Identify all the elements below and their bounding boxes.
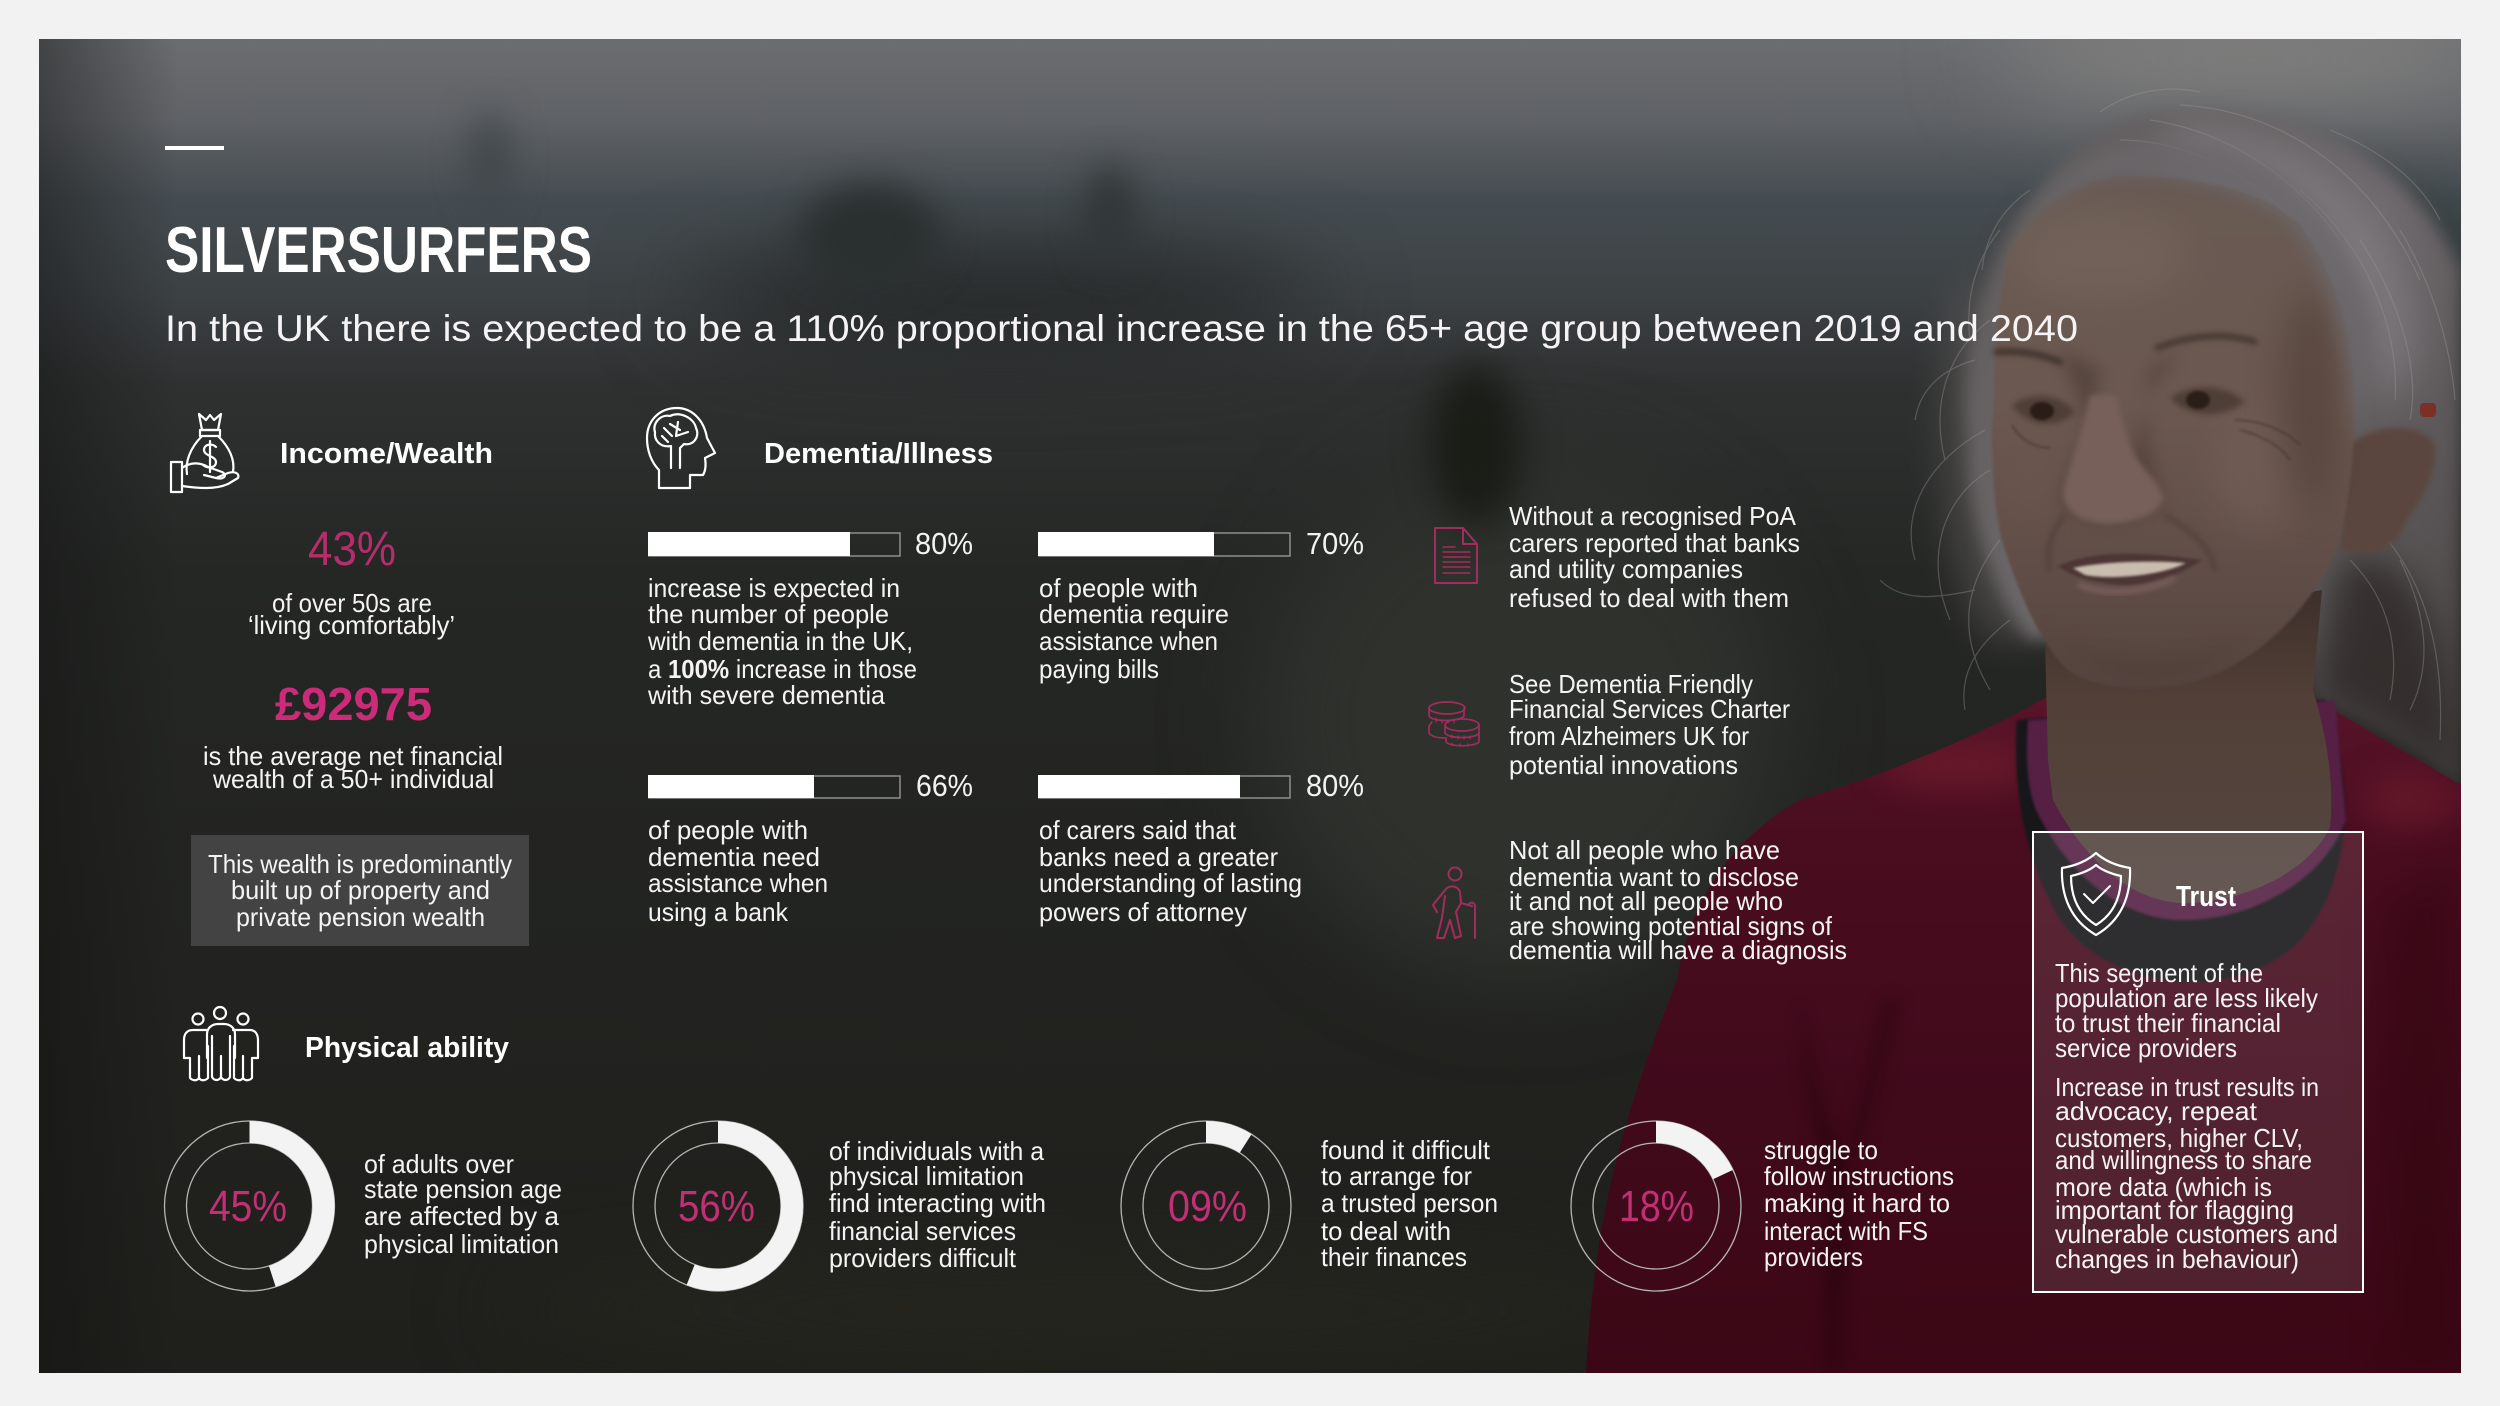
icon: head with brain [647, 408, 715, 488]
text: charter: from Alzheimers UK for [1509, 721, 1749, 751]
text: average wealth: wealth of a 50+ individual [212, 764, 494, 794]
text: 45% caption: of adults over [364, 1149, 514, 1179]
bar stat: 80% carers: of carers said that [1039, 815, 1237, 845]
text: 18% caption: providers [1764, 1242, 1863, 1272]
text: disclosure: dementia want to disclose [1509, 862, 1799, 892]
text: average wealth: is the average net financial [203, 741, 503, 771]
woman: plum collar [2027, 700, 2346, 920]
icon: group of people [184, 1007, 258, 1080]
callout: wealth sources: This wealth is predominantly [208, 849, 512, 879]
text: trust second paragraph: vulnerable customers and [2055, 1219, 2338, 1249]
stat: £92975: £92975 [275, 678, 432, 730]
text: PoA: and utility companies [1509, 554, 1743, 584]
bar stat: 70% paying bills [1038, 526, 1364, 684]
heading: dementia/illness: Dementia/Illness [764, 438, 993, 470]
text: trust second paragraph: and willingness to share [2055, 1145, 2312, 1175]
text: PoA: Without a recognised PoA [1509, 501, 1797, 531]
text: disclosure: Not all people who have [1509, 835, 1780, 865]
donut: 09% [1121, 1121, 1291, 1291]
text: 18% caption: struggle to [1764, 1135, 1878, 1165]
text: disclosure [1509, 835, 1847, 965]
bar stat: 66% using a bank: 66% [916, 768, 973, 803]
text: 09% caption: their finances [1321, 1242, 1467, 1272]
donut: 18% [1571, 1121, 1741, 1291]
woman: brows [1996, 336, 2255, 362]
bar stat: 80% increase: 80% [915, 526, 973, 561]
text: 45% caption [364, 1149, 562, 1259]
text: 18% caption: interact with FS [1764, 1216, 1928, 1246]
woman: nose [2063, 395, 2163, 524]
bar stat: 80% increase: increase is expected in [648, 573, 900, 603]
bar stat: 80% increase: the number of people [648, 599, 889, 629]
subtitle: In the UK there is expected to be a 110% proportional increase in the 65+ age group between 2019 and 2040 [165, 308, 2078, 349]
callout: wealth sources: built up of property and [231, 875, 490, 905]
accent dash [165, 146, 224, 150]
text: 56% caption: physical limitation [829, 1161, 1024, 1191]
bar stat: 66% using a bank: using a bank [648, 897, 789, 927]
woman: hair tie [2420, 403, 2436, 417]
icon: money bag in hand [171, 414, 238, 492]
bar stat: 66% using a bank: dementia need [648, 842, 820, 872]
woman: smile folds [2048, 515, 2215, 570]
bar stat: 80% increase: with severe dementia [647, 680, 886, 710]
text: 56% caption: providers difficult [829, 1243, 1017, 1273]
woman: sweater [1586, 698, 2461, 1373]
text: living comfortably [248, 588, 455, 640]
text: 56% caption [829, 1136, 1046, 1273]
text: disclosure: are showing potential signs of [1509, 911, 1833, 941]
bar stat: 80% carers: powers of attorney [1039, 897, 1247, 927]
bar stat: 70% paying bills: paying bills [1039, 654, 1159, 684]
text: living comfortably: ‘living comfortably’ [248, 610, 455, 640]
bar stat: 70% paying bills: 70% [1306, 526, 1364, 561]
text: trust second paragraph: customers, higher CLV, [2055, 1123, 2303, 1153]
woman: mouth [2058, 554, 2202, 592]
bar stat: 80% increase: with dementia in the UK, [647, 626, 913, 656]
donut: 56%: 56% [678, 1182, 755, 1231]
text: trust second paragraph: important for flagging [2055, 1195, 2294, 1225]
text: 09% caption: to arrange for [1321, 1161, 1472, 1191]
panel: dementia and illness [647, 408, 1847, 965]
text: trust second paragraph: Increase in trust results in [2055, 1072, 2319, 1102]
text: PoA: carers reported that banks [1509, 528, 1800, 558]
donut: 45% [164, 1121, 334, 1291]
icon: elderly person with cane [1433, 868, 1475, 938]
text: 09% caption: to deal with [1321, 1216, 1451, 1246]
bar stat: 80% carers [1038, 768, 1364, 927]
bar stat: 66% using a bank: assistance when [648, 868, 828, 898]
text: charter [1509, 669, 1790, 780]
text: disclosure: dementia will have a diagnosis [1509, 935, 1847, 965]
woman: neck [2045, 590, 2331, 903]
bar stat: 80% increase: a 100% increase in those [648, 654, 917, 684]
bar stat: 80% carers: understanding of lasting [1039, 868, 1302, 898]
text: 18% caption: follow instructions [1764, 1161, 1954, 1191]
text: 45% caption: physical limitation [364, 1229, 559, 1259]
panel: income and wealth [171, 414, 529, 946]
woman: hair over forehead [2154, 142, 2356, 416]
icon: document [1435, 528, 1477, 583]
text: average wealth [203, 741, 503, 794]
text: PoA: refused to deal with them [1509, 583, 1789, 613]
heading: physical ability: Physical ability [305, 1032, 509, 1064]
bar stat: 70% paying bills: of people with [1039, 573, 1198, 603]
text: trust first paragraph: This segment of the [2055, 958, 2263, 988]
panel: trust [2033, 832, 2363, 1292]
icon: coins [1429, 702, 1479, 746]
panel: physical ability [164, 1007, 1954, 1291]
donut: 56% [633, 1121, 803, 1291]
heading: trust: Trust [2176, 881, 2236, 913]
text: trust first paragraph: population are less likely [2055, 983, 2318, 1013]
donut: 18%: 18% [1619, 1182, 1694, 1231]
bar stat: 80% carers: 80% [1306, 768, 1364, 803]
text: 09% caption [1321, 1135, 1498, 1272]
text: PoA [1509, 501, 1800, 613]
text: 09% caption: a trusted person [1321, 1188, 1498, 1218]
woman: face [1992, 176, 2354, 688]
woman: eyes [2012, 387, 2300, 460]
bar stat: 70% paying bills: dementia require [1039, 599, 1229, 629]
text: trust second paragraph [2055, 1072, 2338, 1274]
bar stat: 66% using a bank [648, 768, 973, 927]
text: 18% caption: making it hard to [1764, 1188, 1950, 1218]
bar stat: 66% using a bank: of people with [648, 815, 808, 845]
text: charter: Financial Services Charter [1509, 694, 1790, 724]
text: charter: See Dementia Friendly [1509, 669, 1753, 699]
woman: back hair [1880, 89, 2461, 790]
text: trust first paragraph: service providers [2055, 1033, 2237, 1063]
icon: shield with check [2062, 853, 2130, 935]
text: 56% caption: financial services [829, 1216, 1016, 1246]
text: trust second paragraph: changes in behaviour) [2055, 1244, 2299, 1274]
stat: 43%: 43% [308, 523, 396, 576]
text: trust second paragraph: more data (which is [2055, 1172, 2272, 1202]
text: trust first paragraph: to trust their financial [2055, 1008, 2281, 1038]
text: disclosure: it and not all people who [1509, 886, 1783, 916]
text: 18% caption [1764, 1135, 1954, 1272]
bar stat: 70% paying bills: assistance when [1039, 626, 1218, 656]
bar stat: 80% carers: banks need a greater [1039, 842, 1278, 872]
donut: 09%: 09% [1168, 1182, 1247, 1231]
donut: 45%: 45% [209, 1182, 287, 1231]
callout: wealth sources: private pension wealth [236, 902, 485, 932]
text: 45% caption: state pension age [364, 1174, 562, 1204]
text: 45% caption: are affected by a [364, 1201, 560, 1231]
callout: wealth sources [191, 835, 529, 946]
text: living comfortably: of over 50s are [272, 588, 432, 618]
woman: ear [2340, 428, 2435, 553]
text: 56% caption: find interacting with [829, 1188, 1046, 1218]
bar stat: 80% increase [647, 526, 973, 710]
text: 09% caption: found it difficult [1321, 1135, 1491, 1165]
text: trust first paragraph [2055, 958, 2318, 1063]
woman: dark undershirt [2016, 700, 2344, 982]
heading: income/wealth: Income/Wealth [280, 438, 493, 470]
title: SILVERSURFERS [165, 213, 592, 286]
text: 56% caption: of individuals with a [829, 1136, 1045, 1166]
text: charter: potential innovations [1509, 750, 1738, 780]
text: trust second paragraph: advocacy, repeat [2055, 1096, 2258, 1126]
